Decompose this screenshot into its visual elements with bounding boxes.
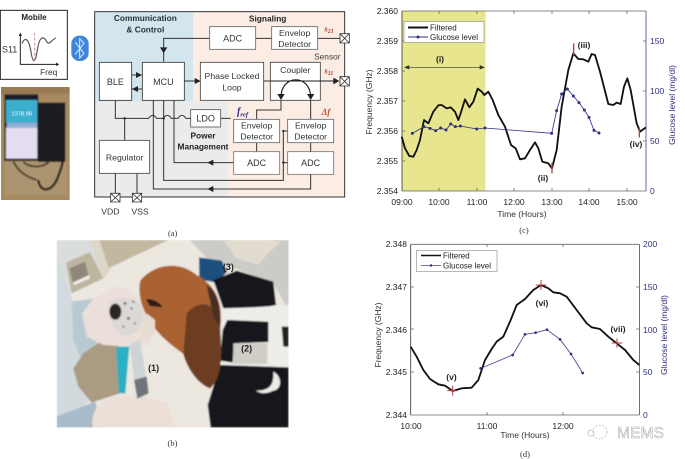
block: MCU [142,62,184,100]
block: Envelop Detector right: Envelop [295,121,326,131]
wiring [115,38,340,197]
background zones [95,12,345,197]
watermark: MEMS: MEMS [617,425,664,442]
arrow: span (i) [405,66,484,69]
glucose line [411,87,600,135]
signal labels: 11 [328,71,333,77]
x axis ticks: 09:00 [391,197,413,207]
ports [111,34,349,202]
block: Envelop Detector left [234,119,280,143]
left axis ticks: 2.346 [386,325,407,335]
caption (d): (d) [520,449,530,459]
left axis ticks: 2.360 [377,6,398,16]
signal labels: s [324,65,328,75]
legend: Glucose level [430,33,478,42]
signal labels: Δf [321,107,331,117]
axis titles: Frequency (GHz) [364,69,374,135]
block: LDO: LDO [196,114,215,124]
arrowheads [123,47,339,192]
x axis ticks: 12:00 [503,197,525,207]
x axis ticks: 15:00 [616,197,638,207]
block: Envelop Detector top: Detector [278,39,311,49]
axis titles [364,65,677,219]
signal labels: s [324,23,328,33]
plot frame [402,11,646,191]
labels (1) (2) (3): (3) [223,262,234,272]
right axis ticks: 150 [643,282,657,292]
left axis ticks: 2.356 [377,126,398,136]
annotations (v)-(vii): (v) [446,372,457,382]
label: VDD VSS: VDD [101,206,119,216]
labels (1) (2) (3): (2) [241,343,252,353]
legend: Filtered [443,252,470,260]
chart: frequency and glucose over time (c) [364,6,677,219]
legend [404,22,484,42]
right axis ticks: 150 [650,36,664,46]
chart: frequency and glucose over time (d) [373,239,669,440]
block: Coupler: Coupler [280,65,311,75]
block: ADC right: ADC [301,158,321,168]
annotations (v)-(vii) [446,298,626,382]
left axis ticks: 2.355 [377,156,398,166]
labels (1) (2) (3): (1) [148,363,159,373]
block: BLE: BLE [107,77,124,87]
zone labels: Power [190,130,216,140]
panel: photo of dog with sensor (b) [57,240,289,428]
caption (c): (c) [519,225,529,235]
right axis ticks: 0 [643,410,648,420]
block: ADC right [288,152,334,174]
legend [416,250,497,272]
axis titles: Glucose level (mg/dl) [659,295,669,375]
annotations (i)-(iv): (iii) [578,40,591,50]
block: MCU: MCU [153,77,174,87]
block: ADC left [234,152,280,174]
label: Sensor: Sensor [314,51,341,61]
block: Regulator [99,140,150,173]
x axis ticks: 10:00 [428,197,450,207]
block: BLE [99,62,132,100]
block: Envelop Detector right [288,119,334,143]
yellow highlighted region (i) [402,11,486,191]
filtered line [402,43,646,173]
block: Envelop Detector left: Envelop [241,121,272,131]
block: Phase Locked Loop: Loop [222,82,242,92]
right axis ticks [650,36,664,196]
left axis ticks: 2.357 [377,96,398,106]
axis titles [373,295,669,440]
x axis ticks: 13:00 [541,197,563,207]
block: Envelop Detector right: Detector [294,132,327,142]
block: ADC top [210,27,256,49]
labels (1) (2) (3) [148,262,252,373]
filtered line [411,285,639,391]
right axis ticks: 50 [643,367,653,377]
annotations (i)-(iv): (ii) [538,173,548,183]
zone labels: Communication [114,13,177,23]
x axis ticks: 12:00 [552,421,574,431]
left axis ticks: 2.359 [377,36,398,46]
photo: phone and device in cardboard box [0,86,71,201]
left axis ticks: 2.354 [377,186,398,196]
left axis ticks: 2.348 [386,239,407,249]
zone labels: & Control [126,24,164,34]
legend: Filtered [430,24,457,32]
left axis ticks: 2.344 [386,410,407,420]
left axis ticks: 2.347 [386,282,407,292]
icon: bluetooth [71,36,89,61]
x axis ticks: 11:00 [467,197,488,207]
right axis ticks [643,239,657,420]
red event markers [447,280,622,396]
left axis ticks [377,6,398,196]
panel: mobile S11 plot [0,10,67,79]
zone labels: Management [178,142,229,152]
block: Envelop Detector left: Detector [240,132,273,142]
left axis ticks [386,239,407,420]
panel: system block diagram (a) [0,10,349,238]
x axis ticks: 14:00 [578,197,600,207]
watermark: MEMS [588,425,664,442]
plot frame [411,244,639,415]
block: Phase Locked Loop [200,62,264,100]
left axis ticks: 2.345 [386,367,407,377]
panel: mobile S11 plot: S11 [2,45,17,55]
red event markers [552,43,639,173]
annotations (i)-(iv): (iv) [630,139,643,149]
x axis ticks: 10:00 [400,421,422,431]
right axis ticks: 50 [650,136,660,146]
right axis ticks: 100 [643,325,657,335]
block: ADC top: ADC [223,34,243,44]
label: VDD VSS: VSS [131,206,149,216]
zone labels [114,13,286,152]
caption (b): (b) [168,438,178,448]
x axis ticks [391,197,638,207]
label: VDD VSS [101,206,149,216]
block: ADC left: ADC [247,158,267,168]
block: Regulator: Regulator [106,152,144,162]
panel: mobile S11 plot: Mobile [21,13,47,22]
annotations (i)-(iv): (i) [436,54,444,64]
right axis ticks: 0 [650,186,655,196]
panel: mobile S11 plot: Freq [40,67,58,77]
right axis ticks: 200 [643,239,657,249]
left axis ticks: 2.358 [377,66,398,76]
signal labels [237,23,334,118]
block: LDO [191,110,221,127]
annotations (v)-(vii): (vii) [610,324,626,334]
block: Phase Locked Loop: Phase Locked [205,71,260,81]
x axis ticks: 11:00 [477,421,498,431]
glucose line [479,328,584,374]
block: Envelop Detector top: Envelop [279,28,310,38]
zone labels: Signaling [249,13,286,23]
x axis ticks [400,421,574,431]
block: Coupler [270,62,338,100]
right axis ticks: 100 [650,86,664,96]
block: Envelop Detector top [272,27,318,49]
axis titles: Frequency (GHz) [373,302,383,368]
signal labels: f [237,107,240,118]
legend: Glucose level [443,262,491,270]
caption (a): (a) [168,229,178,238]
annotations (v)-(vii): (vi) [536,298,549,308]
photo: phone and device in cardboard box: 2378.98 [11,112,32,118]
signal labels: ref [240,111,249,118]
annotations (i)-(iv) [436,40,643,183]
axis titles: Time (Hours) [500,430,550,440]
axis titles: Time (Hours) [497,209,547,219]
signal labels: 21 [327,29,334,35]
axis titles: Glucose level (mg/dl) [667,65,677,145]
